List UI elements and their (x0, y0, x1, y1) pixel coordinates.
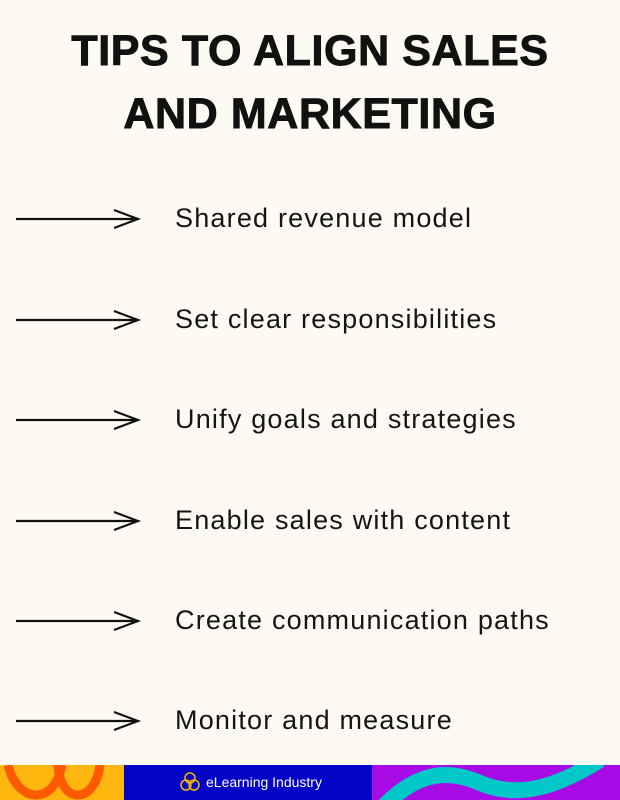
title: AND MARKETING (123, 90, 497, 138)
item 3: Unify goals and strategies (175, 404, 517, 434)
item 6 (16, 705, 453, 735)
item 1 (16, 203, 472, 233)
item 4 (16, 505, 511, 535)
logo text: eLearning Industry (206, 774, 322, 790)
item 2: Set clear responsibilities (175, 304, 497, 334)
item 2 (16, 304, 497, 334)
title: TIPS TO ALIGN SALES (71, 27, 549, 75)
item 3 (16, 404, 517, 434)
footer (0, 765, 620, 800)
item 5: Create communication paths (175, 605, 550, 635)
item 4: Enable sales with content (175, 505, 511, 535)
title (71, 27, 549, 138)
item 1: Shared revenue model (175, 203, 472, 233)
item 6: Monitor and measure (175, 705, 453, 735)
